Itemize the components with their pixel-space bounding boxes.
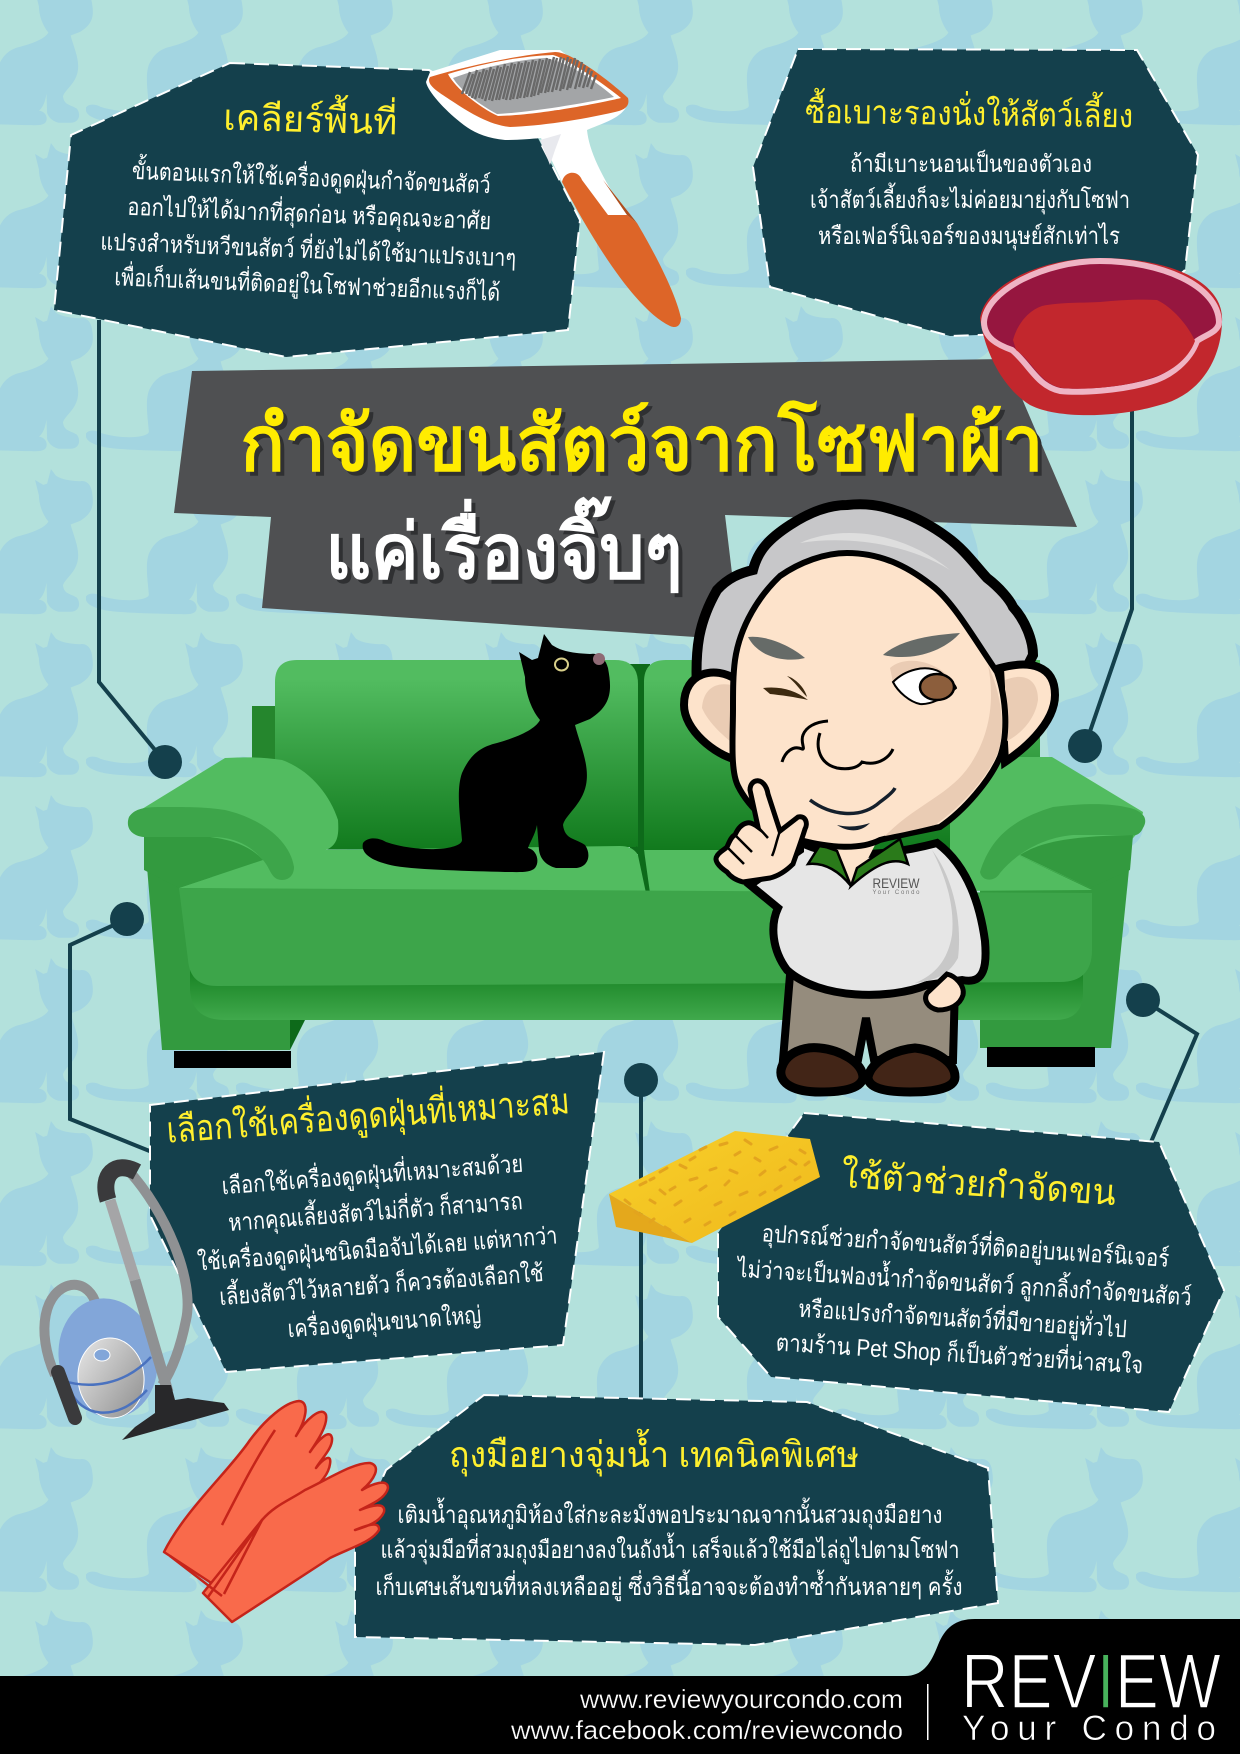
chin (837, 823, 870, 830)
body text: choose the right vacuum: ใช้เครื่องดูดฝุ่นชนิดมือจับได้เลย แต่หากว่า (196, 1219, 559, 1278)
divider (927, 1684, 928, 1740)
sofa back (252, 660, 1040, 854)
shoes (781, 1048, 955, 1092)
panel: use hair removal tools (718, 1113, 1224, 1412)
heading: buy a pet bed: ซื้อเบาะรองนั่งให้สัตว์เลี้ยง (805, 88, 1133, 134)
heading: wet rubber gloves technique: ถุงมือยางจุ่มน้ำ เทคนิคพิเศษ (449, 1428, 859, 1477)
face (732, 553, 1005, 847)
body text: buy a pet bed (810, 149, 1130, 251)
sofa legs (174, 1047, 1095, 1068)
body text: buy a pet bed: เจ้าสัตว์เลี้ยงก็จะไม่ค่อยมายุ่งกับโซฟา (810, 182, 1130, 215)
footer bar (0, 1619, 1240, 1754)
hair highlight (800, 533, 950, 570)
illustration: smiling man character (684, 504, 1055, 1092)
body text: use hair removal tools: หรือแปรงกำจัดขนสัตว์ที่มีขายอยู่ทั่วไป (797, 1292, 1128, 1344)
body text: use hair removal tools (735, 1216, 1193, 1380)
title banner (174, 359, 1077, 640)
open eye (890, 661, 956, 704)
body text: buy a pet bed: หรือเฟอร์นิเจอร์ของมนุษย์สักเท่าไร (818, 222, 1120, 251)
mouth (810, 788, 895, 814)
connector: gloves panel to sofa (624, 1063, 658, 1400)
website links: www.facebook.com/reviewcondo (510, 1715, 903, 1745)
logo: Review Your Condo: REVIEW (961, 1637, 1221, 1725)
sofa right arm (950, 757, 1145, 888)
title line 2: แค่เรื่องจิ๊บๆ (326, 496, 682, 595)
sofa right arm side (980, 830, 1133, 1048)
sofa seat top (179, 846, 1092, 893)
body text: clear the area: เพื่อเก็บเส้นขนที่ติดอยู่ในโซฟาช่วยอีกแรงก็ได้ (114, 260, 501, 308)
connector: vacuum panel to sofa (70, 902, 152, 1152)
body text: buy a pet bed: ถ้ามีเบาะนอนเป็นของตัวเอง (850, 149, 1092, 178)
shirt logo: REVIEW (872, 875, 920, 891)
panel: clear the area (54, 63, 580, 357)
panel: buy a pet bed (753, 49, 1198, 336)
body text: wet rubber gloves technique: เก็บเศษเส้นขนที่หลงเหลืออยู่ ซึ่งวิธีนี้อาจจะต้องทำซ้ำกันหลายๆ ครั้ง (376, 1569, 962, 1602)
collar (808, 839, 908, 886)
body text: choose the right vacuum: เครื่องดูดฝุ่นขนาดใหญ่ (286, 1298, 482, 1344)
shirt (750, 842, 986, 995)
hair (696, 504, 1033, 720)
left ear (684, 672, 737, 760)
body text: use hair removal tools: อุปกรณ์ช่วยกำจัดขนสัตว์ที่ติดอยู่บนเฟอร์นิเจอร์ (761, 1216, 1170, 1274)
illustration: green sofa (128, 660, 1145, 1068)
connector: pet bed to sofa (1068, 400, 1132, 763)
panel: choose the right vacuum (150, 1052, 604, 1372)
sofa seat front (179, 888, 1092, 986)
winking eye (763, 676, 808, 700)
face shade (885, 665, 1002, 836)
pants (783, 975, 955, 1060)
heading: choose the right vacuum: เลือกใช้เครื่องดูดฝุ่นที่เหมาะสม (165, 1076, 571, 1153)
icon: pet bed (980, 258, 1222, 415)
icon: pet grooming brush (426, 50, 681, 327)
body text: choose the right vacuum: เลี้ยงสัตว์ไว้หลายตัว ก็ควรต้องเลือกใช้ (218, 1255, 544, 1311)
shirt logo: Your Condo (872, 890, 920, 896)
pointing hand (716, 781, 806, 882)
icon: vacuum cleaner (44, 1168, 229, 1440)
connector: sponge panel to sofa (1126, 983, 1197, 1142)
panel: wet rubber gloves technique (355, 1395, 998, 1645)
sofa leg shadow (290, 1018, 306, 1050)
illustration: black cat (363, 634, 610, 872)
right ear (1000, 665, 1055, 762)
heading: use hair removal tools: ใช้ตัวช่วยกำจัดขน (840, 1154, 1117, 1213)
title line 1: กำจัดขนสัตว์จากโซฟาผ้า (240, 399, 1044, 487)
body text: use hair removal tools: ตามร้าน Pet Shop ก็เป็นตัวช่วยที่น่าสนใจ (775, 1325, 1144, 1380)
nose and smile crease (782, 721, 893, 769)
shirt logo (872, 875, 920, 896)
body text: clear the area: แปรงสำหรับหวีขนสัตว์ ที่ยังไม่ได้ใช้มาแปรงเบาๆ (100, 225, 517, 272)
body text: choose the right vacuum (196, 1147, 559, 1344)
body text: wet rubber gloves technique (376, 1497, 962, 1602)
title line 2: แค่เรื่องจิ๊บๆ (330, 500, 686, 599)
sofa left arm (128, 757, 338, 888)
heading: clear the area: เคลียร์พื้นที่ (223, 91, 398, 142)
body text: wet rubber gloves technique: เติมน้ำอุณหภูมิห้องใส่กะละมังพอประมาณจากนั้นสวมถุงมือยาง (398, 1497, 942, 1530)
logo: Review Your Condo: Your Condo (962, 1709, 1216, 1748)
title line 1: กำจัดขนสัตว์จากโซฟาผ้า (244, 403, 1048, 491)
body text: clear the area: ออกไปให้ได้มากที่สุดก่อน หรือคุณจะอาศัย (127, 190, 492, 236)
body text: clear the area: ขั้นตอนแรกให้ใช้เครื่องดูดฝุ่นกำจัดขนสัตว์ (131, 153, 491, 200)
right hand (926, 974, 963, 1010)
website links (510, 1684, 903, 1745)
body text: choose the right vacuum: หากคุณเลี้ยงสัตว์ไม่กี่ตัว ก็สามารถ (227, 1183, 524, 1238)
body text: wet rubber gloves technique: แล้วจุ่มมือที่สวมถุงมือยางลงในถังน้ำ เสร็จแล้วใช้มือไล่ถูไปตามโซฟา (380, 1532, 960, 1565)
body text: choose the right vacuum: เลือกใช้เครื่องดูดฝุ่นที่เหมาะสมด้วย (221, 1147, 524, 1201)
icon: rubber gloves (164, 1401, 388, 1622)
sofa left arm side (144, 830, 290, 1050)
connector: clear-the-area panel to sofa (99, 320, 182, 779)
body text: clear the area (100, 153, 517, 308)
eyebrows (748, 633, 960, 660)
website links: www.reviewyourcondo.com (579, 1684, 903, 1714)
shirt shade (915, 850, 959, 983)
sofa under band (190, 960, 1083, 1020)
icon: yellow sponge (609, 1131, 820, 1243)
